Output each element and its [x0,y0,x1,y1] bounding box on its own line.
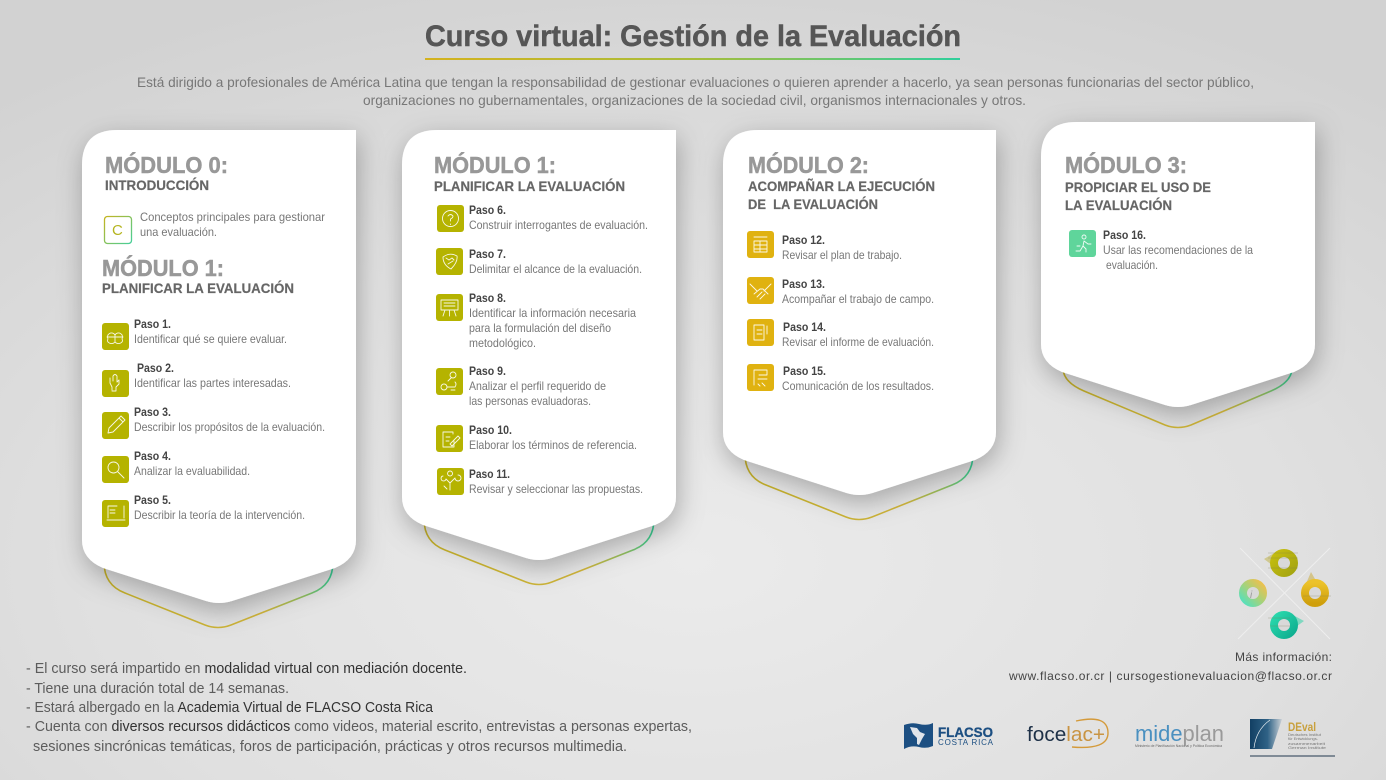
paso 13 [747,277,934,306]
paso 9: las personas evaluadoras. [469,394,591,408]
paso 7: Delimitar el alcance de la evaluación. [469,262,642,276]
paso 5: Paso 5. [134,493,171,507]
paso 3: Describir los propósitos de la evaluación. [134,420,325,434]
contact information [1008,650,1332,683]
panel: módulo 3 [1041,122,1315,428]
title: Curso virtual: Gestión de la Evaluación [425,20,961,53]
paso 11 [437,467,643,496]
panel: módulo 0 y 1: INTRODUCCIÓN [105,178,209,193]
paso 1: Paso 1. [134,317,171,331]
panel: módulo 3: LA EVALUACIÓN [1065,198,1172,213]
paso 5 [102,493,305,527]
panel: módulo 1: PLANIFICAR LA EVALUACIÓN [434,179,625,194]
paso 8: para la formulación del diseño [469,321,611,335]
logo: DEval [1250,719,1335,756]
panel: módulo 2: ACOMPAÑAR LA EJECUCIÓN [748,179,935,194]
paso 9 [436,364,606,408]
concepts item [104,210,325,244]
logo: DEval: zusammenarbeit [1288,742,1325,746]
panel: módulo 0 y 1: MÓDULO 1: [102,254,224,281]
paso 16: evaluación. [1106,258,1158,272]
paso 12: Paso 12. [782,233,825,247]
paso 2: Identificar las partes interesadas. [134,376,291,390]
paso 6: Construir interrogantes de evaluación. [469,218,648,232]
course details text: - Cuenta con diversos recursos didácticos como videos, material escrito, entrevistas a personas expertas, [26,719,692,735]
paso 12: Revisar el plan de trabajo. [782,248,902,262]
paso 14: Revisar el informe de evaluación. [782,335,934,349]
paso 1: Identificar qué se quiere evaluar. [134,332,287,346]
logo: FLACSO Costa Rica: FLACSO [938,724,993,740]
paso 4 [102,449,250,483]
paso 16: Paso 16. [1103,228,1146,242]
course details text: - El curso será impartido en modalidad virtual con mediación docente. [26,661,467,677]
logo: DEval: DEval [1288,720,1316,734]
concepts item: C [112,222,123,239]
course details text [26,661,692,755]
panel: módulo 0 y 1 [82,130,356,628]
intro text: organizaciones no gubernamentales, organizaciones de la sociedad civil, organismos internacionales y otros. [363,92,1026,108]
panel: módulo 2: MÓDULO 2: [748,151,869,178]
paso 11: Paso 11. [469,467,510,481]
logo: FLACSO Costa Rica [904,723,994,749]
icon: four circles emblem [1238,548,1331,639]
paso 1 [102,317,287,350]
contact information: www.flacso.or.cr | cursogestionevaluacion@flacso.or.cr [1008,669,1332,683]
paso 13: Acompañar el trabajo de campo. [782,292,934,306]
logo: DEval: Deutsches Institut [1288,733,1321,737]
panel: módulo 2 [723,130,996,520]
paso 6: Paso 6. [469,203,506,217]
intro text: Está dirigido a profesionales de América Latina que tengan la responsabilidad de gestionar evaluaciones o quieren aprender a hacerlo, ya sean personas funcionarias del sector público, [137,74,1254,90]
paso 14: Paso 14. [783,320,826,334]
paso 16: Usar las recomendaciones de la [1103,243,1253,257]
logo: FLACSO Costa Rica: COSTA RICA [938,738,994,747]
paso 13: Paso 13. [782,277,825,291]
panel: módulo 2: DE LA EVALUACIÓN [748,197,878,212]
paso 16 [1069,228,1253,272]
paso 2: Paso 2. [137,361,174,375]
paso 8: Identificar la información necesaria [469,306,636,320]
contact information: Más información: [1235,650,1332,664]
paso 7 [436,247,642,276]
paso 10 [436,423,637,452]
panel: módulo 1: MÓDULO 1: [434,151,556,178]
paso 10: Elaborar los términos de referencia. [469,438,637,452]
paso 8 [436,291,636,350]
paso 9: Paso 9. [469,364,506,378]
paso 15: Paso 15. [783,364,826,378]
panel: módulo 3: PROPICIAR EL USO DE [1065,180,1211,195]
paso 8: metodológico. [469,336,536,350]
panel: módulo 1 [402,130,676,584]
paso 4: Paso 4. [134,449,171,463]
paso 4: Analizar la evaluabilidad. [134,464,250,478]
paso 15 [747,364,934,393]
paso 6 [437,203,648,232]
course details text: sesiones sincrónicas temáticas, foros de participación, prácticas y otros recursos multimedia. [33,739,627,755]
paso 8: Paso 8. [469,291,506,305]
course details text: - Estará albergado en la Academia Virtual de FLACSO Costa Rica [26,700,434,716]
panel: módulo 0 y 1: PLANIFICAR LA EVALUACIÓN [102,281,294,296]
icon: four circles emblem: i [1250,590,1253,601]
panel: módulo 0 y 1: MÓDULO 0: [105,151,228,178]
logo: mideplan: mideplan [1135,721,1224,746]
paso 5: Describir la teoría de la intervención. [134,508,305,522]
paso 7: Paso 7. [469,247,506,261]
paso 3 [102,405,325,439]
logo: DEval: German Institute [1288,746,1326,750]
paso 14 [747,319,934,349]
course details text: - Tiene una duración total de 14 semanas. [26,681,289,697]
logo: focelac+: focelac+ [1027,724,1105,746]
intro text [137,74,1254,108]
logo: DEval: für Entwicklungs- [1288,737,1319,741]
logo: mideplan: Ministerio de Planificación Nacional y Política Económica [1135,744,1222,748]
paso 9: Analizar el perfil requerido de [469,379,606,393]
panel: módulo 3: MÓDULO 3: [1065,151,1187,178]
concepts item: una evaluación. [140,225,217,239]
paso 11: Revisar y seleccionar las propuestas. [469,482,643,496]
concepts item: Conceptos principales para gestionar [140,210,325,224]
paso 12 [747,231,902,262]
paso 3: Paso 3. [134,405,171,419]
paso 15: Comunicación de los resultados. [782,379,934,393]
paso 10: Paso 10. [469,423,512,437]
paso 2 [102,361,291,397]
